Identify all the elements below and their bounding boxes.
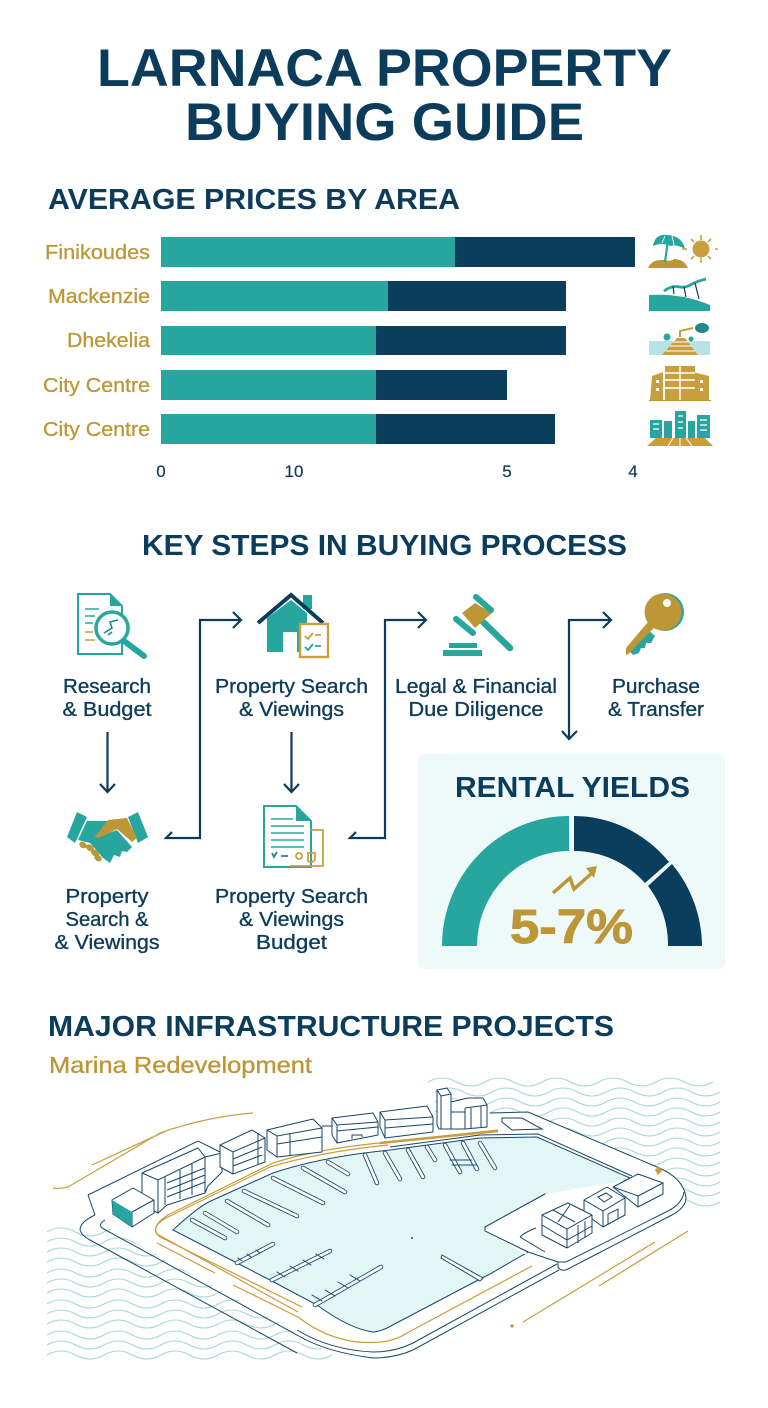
text: property search viewings budget: Property Search	[215, 886, 368, 908]
teal face	[112, 1200, 132, 1227]
text: purchase and transfer: Purchase	[612, 676, 700, 698]
arrow: research to handshake	[100, 732, 115, 792]
heading: rental yields: RENTAL YIELDS	[455, 772, 690, 804]
trend arrowhead	[586, 866, 597, 878]
heading: key steps in buying process: KEY STEPS IN BUYING PROCESS	[142, 530, 627, 562]
gold promenade lines	[53, 1113, 688, 1342]
text: research and budget: & Budget	[62, 699, 152, 721]
icon: key	[626, 593, 684, 655]
bar: Finikoudes: Finikoudes	[45, 242, 150, 264]
text: legal and financial due diligence: Legal & Financial	[395, 676, 557, 698]
bar: Dhekelia	[67, 326, 566, 355]
basin double edge	[390, 1134, 632, 1176]
text: property search and viewings: Search &	[66, 909, 149, 931]
title: LARNACA PROPERTY	[97, 39, 672, 98]
icon: coastline	[649, 279, 710, 311]
icon: handshake	[67, 812, 148, 863]
title	[97, 39, 672, 152]
quay land	[88, 1110, 685, 1358]
axis labels: 4	[628, 462, 638, 481]
arrow: document up to legal	[350, 612, 426, 838]
water basin	[173, 1137, 630, 1332]
panel: rental yields	[418, 754, 725, 969]
bar: Mackenzie	[48, 281, 566, 311]
waves: left	[47, 1228, 332, 1359]
peninsula	[485, 1180, 630, 1256]
text: property search and viewings top: & Viewings	[239, 699, 344, 721]
buildings: peninsula	[542, 1174, 663, 1248]
text: legal and financial due diligence: Due Diligence	[408, 699, 544, 721]
icon: contract document	[264, 806, 323, 867]
waves: right	[428, 1078, 720, 1206]
bar chart: average prices by area	[43, 237, 638, 481]
icon: house with checklist	[258, 595, 328, 657]
quay outlines	[80, 1112, 686, 1358]
heading: average prices by area: AVERAGE PRICES BY AREA	[48, 184, 460, 216]
icon: boardwalk path	[649, 323, 710, 355]
bar: Finikoudes	[45, 237, 635, 267]
axis labels: 5	[502, 462, 512, 481]
bar: Mackenzie: Mackenzie	[48, 286, 150, 308]
axis labels: 10	[285, 462, 303, 481]
arrow: handshake up to property search	[166, 612, 241, 838]
illustration: marina map	[47, 1078, 720, 1359]
value: 5-7%: 5-7%	[510, 901, 633, 954]
bar: Dhekelia: Dhekelia	[67, 330, 151, 352]
icon: gold city buildings	[649, 366, 711, 400]
icon: trend arrow	[553, 873, 592, 893]
icon: beach umbrella and sun	[648, 235, 718, 268]
arrow: branch to purchase and rental yields	[562, 612, 611, 739]
axis labels: 0	[156, 462, 166, 481]
piers	[192, 1143, 495, 1305]
text: purchase and transfer: & Transfer	[608, 699, 704, 721]
text: property search and viewings: & Viewings	[54, 932, 160, 954]
buildings: waterfront row	[112, 1088, 487, 1227]
subheading: marina redevelopment: Marina Redevelopment	[49, 1052, 313, 1078]
heading: major infrastructure projects: MAJOR INFRASTRUCTURE PROJECTS	[48, 1011, 614, 1043]
text: property search viewings budget: Budget	[256, 932, 327, 954]
text: property search and viewings top: Property Search	[215, 676, 368, 698]
icon: teal city buildings and plaza	[647, 411, 713, 446]
bar: City Centre: City Centre	[43, 375, 150, 397]
arrow: property search to document	[284, 732, 299, 792]
bar: City Centre	[43, 370, 507, 400]
peninsula outline	[485, 1194, 545, 1252]
title: BUYING GUIDE	[185, 93, 584, 152]
icon: research document with magnifier	[78, 594, 144, 656]
bar: City Centre second: City Centre	[43, 419, 150, 441]
bar: City Centre second	[43, 414, 555, 444]
text: property search viewings budget: & Viewings	[239, 909, 344, 931]
axis labels	[156, 462, 638, 481]
icon: gavel	[443, 597, 510, 656]
text: research and budget: Research	[63, 676, 151, 698]
gauge chart	[442, 816, 702, 946]
text: property search and viewings: Property	[66, 886, 148, 908]
